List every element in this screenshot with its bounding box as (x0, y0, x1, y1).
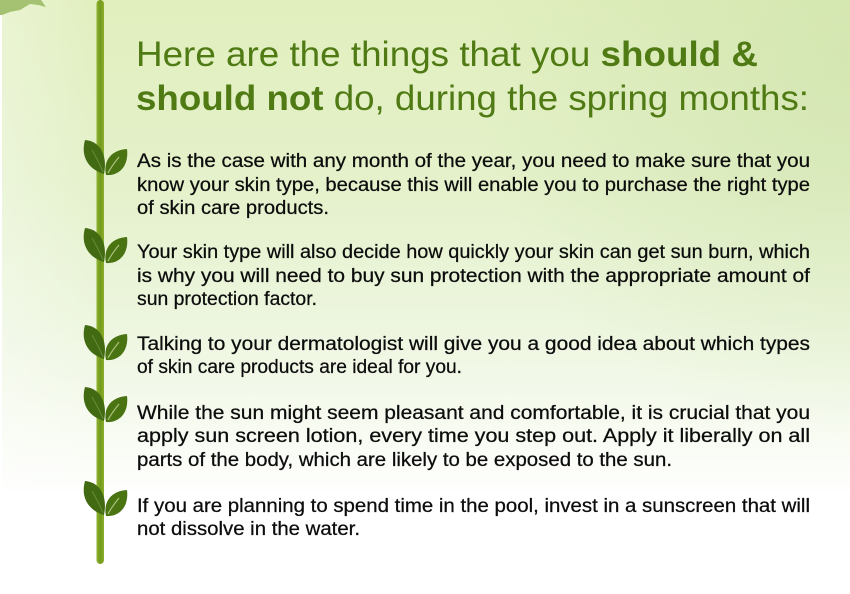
leaf pair 4 (84, 387, 127, 422)
paragraph 4: apply sun screen lotion, every time you step out. Apply it liberally on all (137, 426, 810, 447)
paragraph 3 (137, 334, 810, 378)
paragraph 2: Your skin type will also decide how quickly your skin can get sun burn, which (137, 242, 810, 263)
paragraph 1: of skin care products. (137, 198, 329, 219)
paragraph 4: parts of the body, which are likely to be exposed to the sun. (137, 450, 672, 471)
leaf pair 2 (84, 228, 127, 263)
paragraph 2: is why you will need to buy sun protection with the appropriate amount of (137, 266, 811, 287)
paragraph 5 (137, 496, 810, 540)
paragraph 1 (137, 151, 810, 219)
title: should not do, during the spring months: (136, 79, 809, 118)
paragraph 3: of skin care products are ideal for you. (137, 357, 462, 378)
paragraph 5: not dissolve in the water. (137, 519, 360, 540)
title (136, 35, 809, 118)
vine stem (96, 0, 104, 564)
leaf pair 5 (84, 481, 127, 516)
paragraph 5: If you are planning to spend time in the pool, invest in a sunscreen that will (137, 496, 810, 517)
paragraph 4: While the sun might seem pleasant and comfortable, it is crucial that you (137, 403, 810, 424)
paragraph 4 (137, 403, 810, 471)
leaf pair 1 (84, 140, 127, 175)
paragraph 3: Talking to your dermatologist will give you a good idea about which types (137, 334, 810, 355)
corner leaf (0, 0, 46, 15)
title: Here are the things that you should & (136, 35, 758, 74)
leaf pair 3 (84, 325, 127, 360)
paragraph 2 (137, 242, 811, 310)
paragraph 1: As is the case with any month of the year, you need to make sure that you (137, 151, 810, 172)
paragraph 2: sun protection factor. (137, 289, 317, 310)
paragraph 1: know your skin type, because this will enable you to purchase the right type (137, 175, 810, 196)
